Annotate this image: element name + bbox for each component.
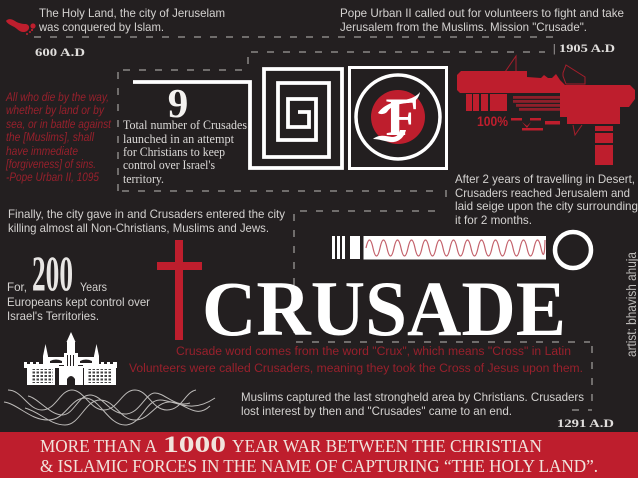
text: total number of crusades: Total number of Crusades — [123, 117, 247, 132]
text: 200 years: Years — [80, 280, 107, 294]
text: Muslims captured the last stronghold: lost interest by then and "Crusades" came to an end. — [241, 404, 512, 418]
text: 200 years: For, — [7, 280, 27, 294]
text: Holy Land conquered: was conquered by Islam. — [38, 20, 164, 34]
icon: castle — [24, 332, 117, 385]
banner: bottom red band: 1000 — [163, 432, 226, 457]
text: crusade word origin: Crusade word comes from the word "Crux", which means "Cross" in Latin — [176, 346, 571, 358]
text: finally the city gave in: killing almost all Non-Christians, Muslims and Jews. — [8, 221, 269, 235]
text: after 2 years — [455, 172, 638, 227]
banner: bottom red band — [0, 432, 638, 478]
quote: Pope Urban II in red: All who die by the way, — [5, 92, 109, 104]
icon: red footprint — [6, 19, 36, 35]
text: after 2 years: After 2 years of travelling in Desert, — [455, 172, 635, 186]
icon: interwoven waves — [4, 390, 215, 425]
text: Muslims captured the last stronghold — [241, 390, 584, 418]
text: Pope Urban call: Jerusalem from the Muslims. Mission "Crusade". — [340, 20, 587, 34]
icon: striped bar with wave — [332, 236, 546, 260]
quote: Pope Urban II in red: -Pope Urban II, 1095 — [6, 172, 100, 184]
text: finally the city gave in: Finally, the city gave in and Crusaders entered the city — [8, 207, 285, 221]
banner: bottom red band: & ISLAMIC FORCES IN THE NAME OF CAPTURING “THE HOLY LAND”. — [40, 456, 598, 476]
icon: red cross — [157, 240, 202, 340]
text: crusade word origin — [129, 346, 583, 375]
text: total number of crusades: territory. — [123, 171, 164, 186]
text: after 2 years: it for 2 months. — [455, 213, 532, 227]
text: Pope Urban call: Pope Urban II called out for volunteers to fight and take — [340, 6, 624, 20]
text: Holy Land conquered — [38, 6, 225, 34]
icon: framed F emblem — [350, 68, 446, 168]
banner: bottom red band: YEAR WAR BETWEEN THE CHRISTIAN — [232, 436, 542, 456]
text: crusade word origin: Volunteers were called Crusaders, meaning they took the Cross of Jesus upon them. — [129, 363, 583, 375]
quote: Pope Urban II in red: have immediate — [6, 146, 78, 158]
icon: framed F emblem: F — [386, 87, 418, 147]
quote: Pope Urban II in red: the [Muslims], shall — [6, 132, 94, 144]
text: total number of crusades: for Christians to keep — [123, 144, 225, 159]
dashed timeline connectors — [34, 37, 592, 410]
quote: Pope Urban II in red: sea, or in battle against — [6, 119, 112, 131]
icon: ring — [555, 232, 591, 268]
number: 9 crusades: 9 — [168, 80, 188, 126]
text: 200 years — [7, 245, 150, 323]
date: 1905 A.D: 1905 A.D — [559, 41, 615, 55]
text: 200 years: Europeans kept control over — [7, 295, 150, 309]
icon: square spiral — [133, 69, 342, 168]
text: total number of crusades: launched in an attempt — [123, 131, 234, 146]
text: total number of crusades: control over Israel's — [123, 157, 215, 172]
date: 1291 A.D: 1291 A.D — [557, 416, 614, 430]
icon: red ray gun — [457, 56, 635, 165]
text: 200 years: Israel's Territories. — [7, 309, 99, 323]
text: Holy Land conquered: The Holy Land, the city of Jeruselam — [39, 6, 225, 20]
title: CRUSADE: CRUSADE — [202, 265, 566, 352]
quote: Pope Urban II in red: whether by land or by — [6, 105, 105, 117]
text: after 2 years: Crusaders reached Jerusalem and — [455, 186, 630, 200]
text: 200 years: 200 — [32, 245, 73, 301]
quote: Pope Urban II in red — [5, 92, 112, 184]
quote: Pope Urban II in red: [forgiveness] of sins. — [5, 159, 96, 171]
text: total number of crusades — [123, 117, 247, 186]
text: finally the city gave in — [8, 207, 285, 235]
banner: bottom red band: MORE THAN A — [40, 436, 157, 456]
date: 1905 A.D: | — [553, 41, 555, 55]
text: Muslims captured the last stronghold: Muslims captured the last strongheld area by Christians. Crusaders — [241, 390, 584, 404]
icon: red ray gun: 100% — [477, 113, 508, 129]
text: Pope Urban call — [340, 6, 624, 34]
date: 600 A.D: 600 A.D — [35, 45, 85, 59]
